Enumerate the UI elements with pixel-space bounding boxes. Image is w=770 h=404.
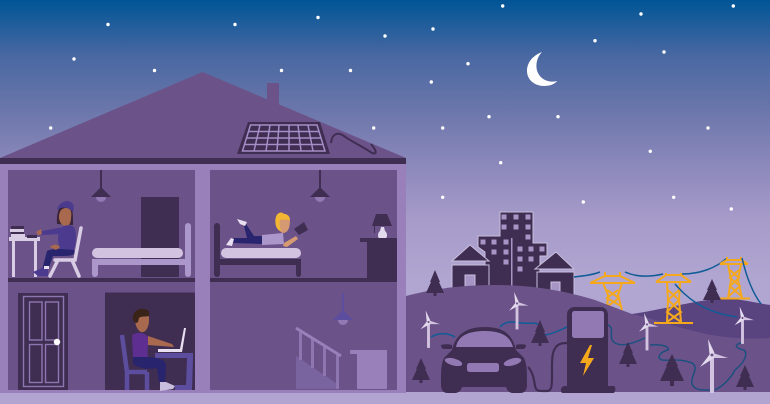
electric car (441, 327, 527, 393)
grid wires lower and underground cables (431, 258, 761, 390)
boy on laptop (132, 309, 175, 391)
hills (406, 285, 770, 393)
room: upper left (8, 170, 195, 278)
solar panel (237, 122, 376, 154)
lightning bolt (580, 345, 594, 376)
tower 3 (720, 257, 750, 298)
bed left (92, 223, 191, 277)
woman studying (33, 201, 76, 276)
ceiling lamp upper right (310, 170, 330, 202)
tower 1 (590, 272, 635, 310)
city buildings and houses (452, 212, 574, 296)
roof fascia (0, 158, 406, 164)
tower 2 (654, 273, 693, 323)
right house (535, 252, 574, 296)
ceiling lamp upper left (91, 170, 111, 202)
chair white (50, 228, 81, 276)
windshield (456, 331, 513, 347)
charging station (561, 307, 615, 393)
wind turbine small 4 (735, 306, 754, 344)
wind turbine small 1 (421, 310, 440, 348)
trees (412, 270, 754, 390)
wind turbine small 3 (639, 313, 659, 350)
front door (18, 293, 68, 390)
upper floor slabs (8, 278, 397, 282)
alcove dark doorway (141, 197, 179, 277)
laptop (158, 328, 186, 352)
girl reading on bed (226, 212, 308, 247)
room: upper right (210, 170, 397, 278)
alcove where boy works (105, 292, 195, 390)
ceiling lamp lower right (333, 293, 353, 325)
staircase (296, 328, 341, 389)
car mirrors (441, 344, 526, 349)
solar cable (331, 134, 376, 153)
desk with books (9, 226, 40, 277)
charger screen (572, 311, 604, 338)
room: lower right (210, 282, 397, 390)
crescent moon (527, 52, 557, 86)
room: lower left (8, 282, 195, 390)
headlights (444, 356, 463, 368)
table lamp (372, 214, 392, 238)
house wall structure (0, 164, 406, 393)
grille (467, 363, 499, 372)
building windows (480, 214, 544, 272)
charging cable (528, 343, 568, 391)
stars (49, 4, 735, 211)
apartment blocks (478, 212, 547, 290)
door knob (54, 339, 60, 345)
ground strip (0, 392, 770, 404)
grid wires upper (574, 258, 727, 277)
blue desk (155, 353, 193, 390)
left house (452, 245, 489, 292)
bedside cabinet (360, 238, 397, 278)
wind turbine large (700, 339, 728, 393)
bed right (214, 223, 301, 277)
roof (0, 72, 406, 158)
wind turbine small 2 (509, 292, 529, 329)
landing block (350, 350, 387, 389)
front hill (406, 285, 770, 393)
dark back hill (632, 299, 770, 339)
blue chair (122, 335, 147, 390)
